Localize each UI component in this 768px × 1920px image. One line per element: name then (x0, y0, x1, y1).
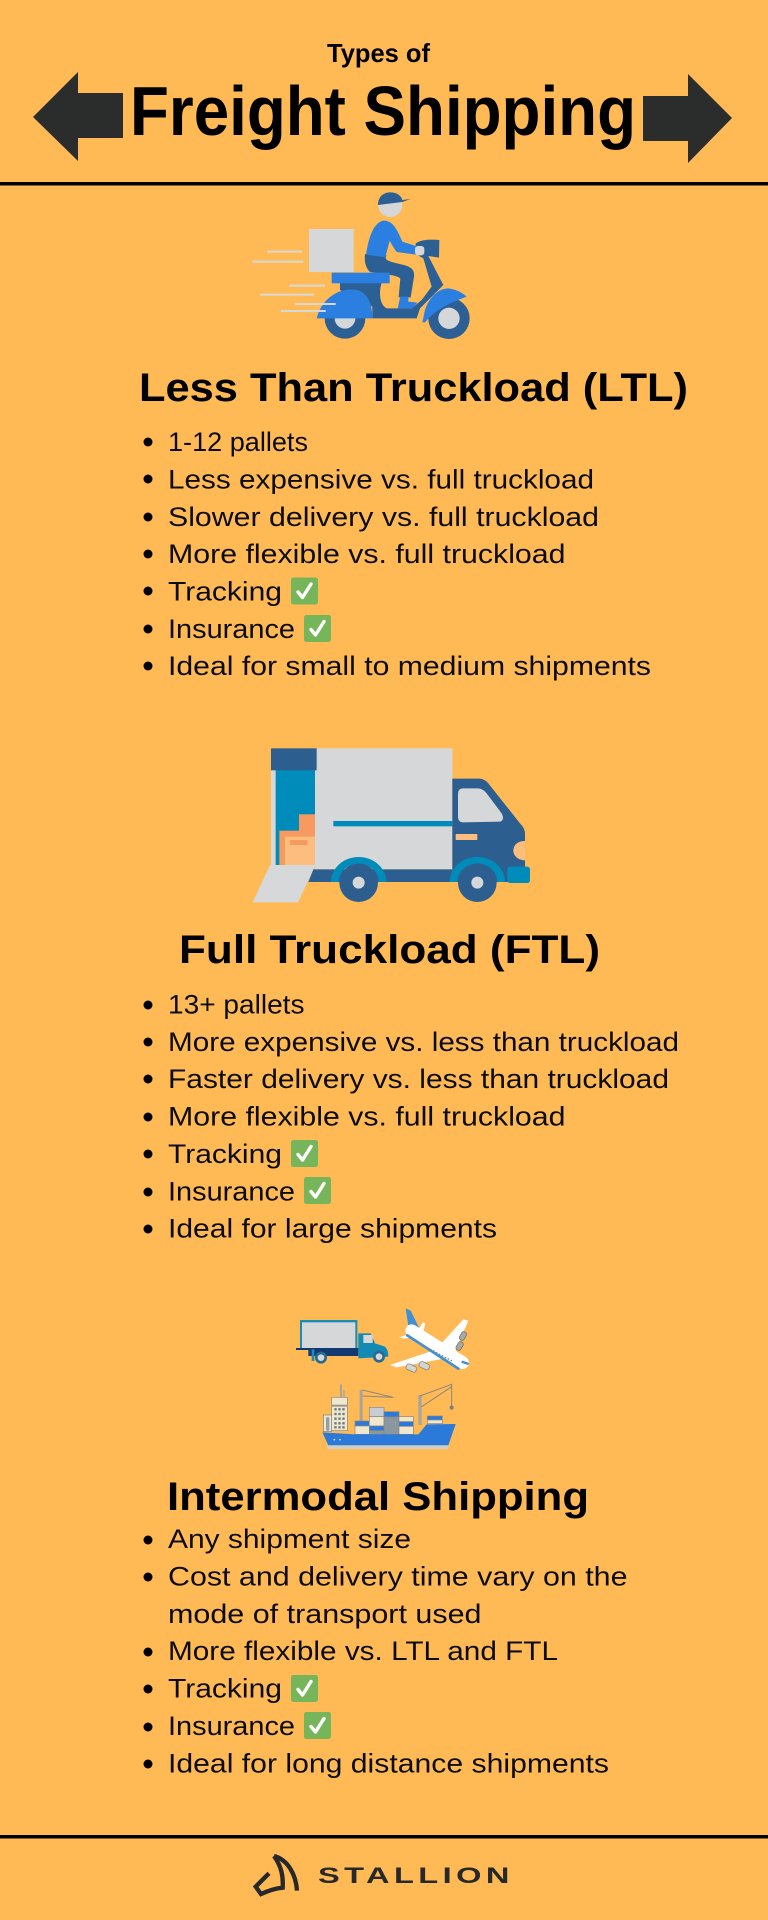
list: FTL features: Tracking (168, 1139, 282, 1169)
icon: truck, plane and cargo ship (296, 1308, 469, 1449)
icon: box truck (253, 748, 530, 902)
list: LTL features: Ideal for small to medium shipments (168, 651, 651, 681)
main title: Freight Shipping (130, 72, 636, 150)
list: FTL features: Insurance (168, 1176, 295, 1206)
list: FTL features: 13+ pallets (168, 990, 304, 1020)
list: Intermodal features: Any shipment size (168, 1524, 411, 1554)
icon: delivery scooter (252, 192, 470, 339)
list: FTL features: Ideal for large shipments (168, 1214, 497, 1244)
list: Intermodal features: More flexible vs. LTL and FTL (168, 1636, 558, 1666)
icon: left arrow (33, 72, 123, 161)
list: FTL features: Faster delivery vs. less than truckload (168, 1064, 669, 1094)
header (33, 38, 732, 163)
list: Intermodal features: Insurance (168, 1711, 295, 1741)
list: LTL features: 1-12 pallets (168, 427, 308, 457)
heading: LTL: Less Than Truckload (LTL) (139, 366, 688, 410)
heading: FTL: Full Truckload (FTL) (179, 928, 600, 972)
icon: horse head mark (256, 1856, 297, 1894)
panel: Less Than Truckload (139, 192, 688, 681)
wordmark: STALLION (318, 1863, 514, 1888)
list: LTL features: Less expensive vs. full truckload (168, 464, 594, 494)
list: LTL features: Slower delivery vs. full truckload (168, 502, 599, 532)
icon: right arrow (643, 74, 732, 163)
panel: Intermodal Shipping (144, 1308, 628, 1778)
footer logo: Stallion (256, 1856, 514, 1894)
title kicker: Types of (327, 38, 430, 68)
list: Intermodal features (144, 1524, 628, 1778)
list: Intermodal features: Tracking (168, 1674, 282, 1704)
list: Intermodal features: Ideal for long distance shipments (168, 1748, 609, 1778)
list: Intermodal features: mode of transport used (168, 1599, 482, 1629)
list: Intermodal features: Cost and delivery time vary on the (168, 1562, 628, 1592)
list: LTL features (144, 427, 651, 681)
list: FTL features: More expensive vs. less than truckload (168, 1027, 679, 1057)
list: FTL features: More flexible vs. full truckload (168, 1102, 566, 1132)
list: LTL features: More flexible vs. full truckload (168, 539, 566, 569)
list: LTL features: Insurance (168, 614, 295, 644)
list: LTL features: Tracking (168, 576, 282, 606)
panel: Full Truckload (144, 748, 679, 1244)
heading: Intermodal: Intermodal Shipping (167, 1475, 589, 1519)
list: FTL features (144, 990, 679, 1244)
